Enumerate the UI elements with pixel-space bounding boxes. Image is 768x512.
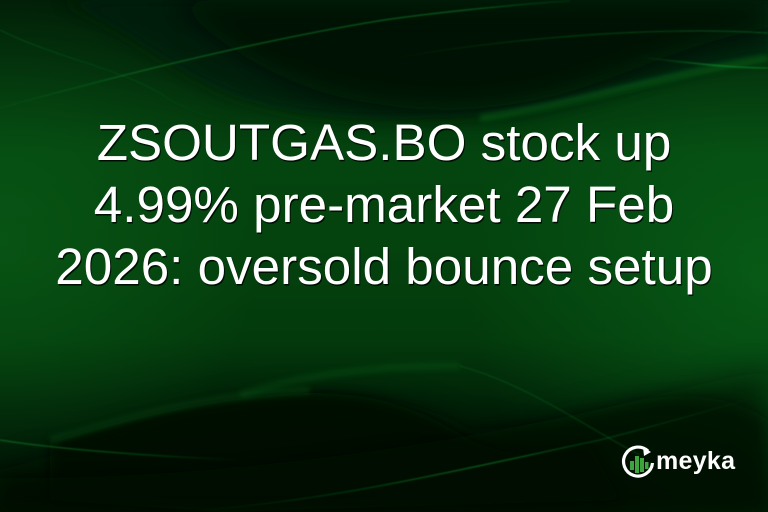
icon: ring with bars [622,446,654,478]
top light streaks [0,1,570,108]
title: ZSOUTGAS.BO stock up [97,114,671,171]
logo: meyka [622,446,736,478]
wordmark: meyka [656,447,735,475]
title: 2026: oversold bounce setup [55,238,713,295]
title [55,114,713,296]
bottom light streaks [50,390,310,440]
bottom dark shapes [0,370,768,512]
top dark shapes [60,0,768,119]
title: 4.99% pre-market 27 Feb [94,176,674,233]
